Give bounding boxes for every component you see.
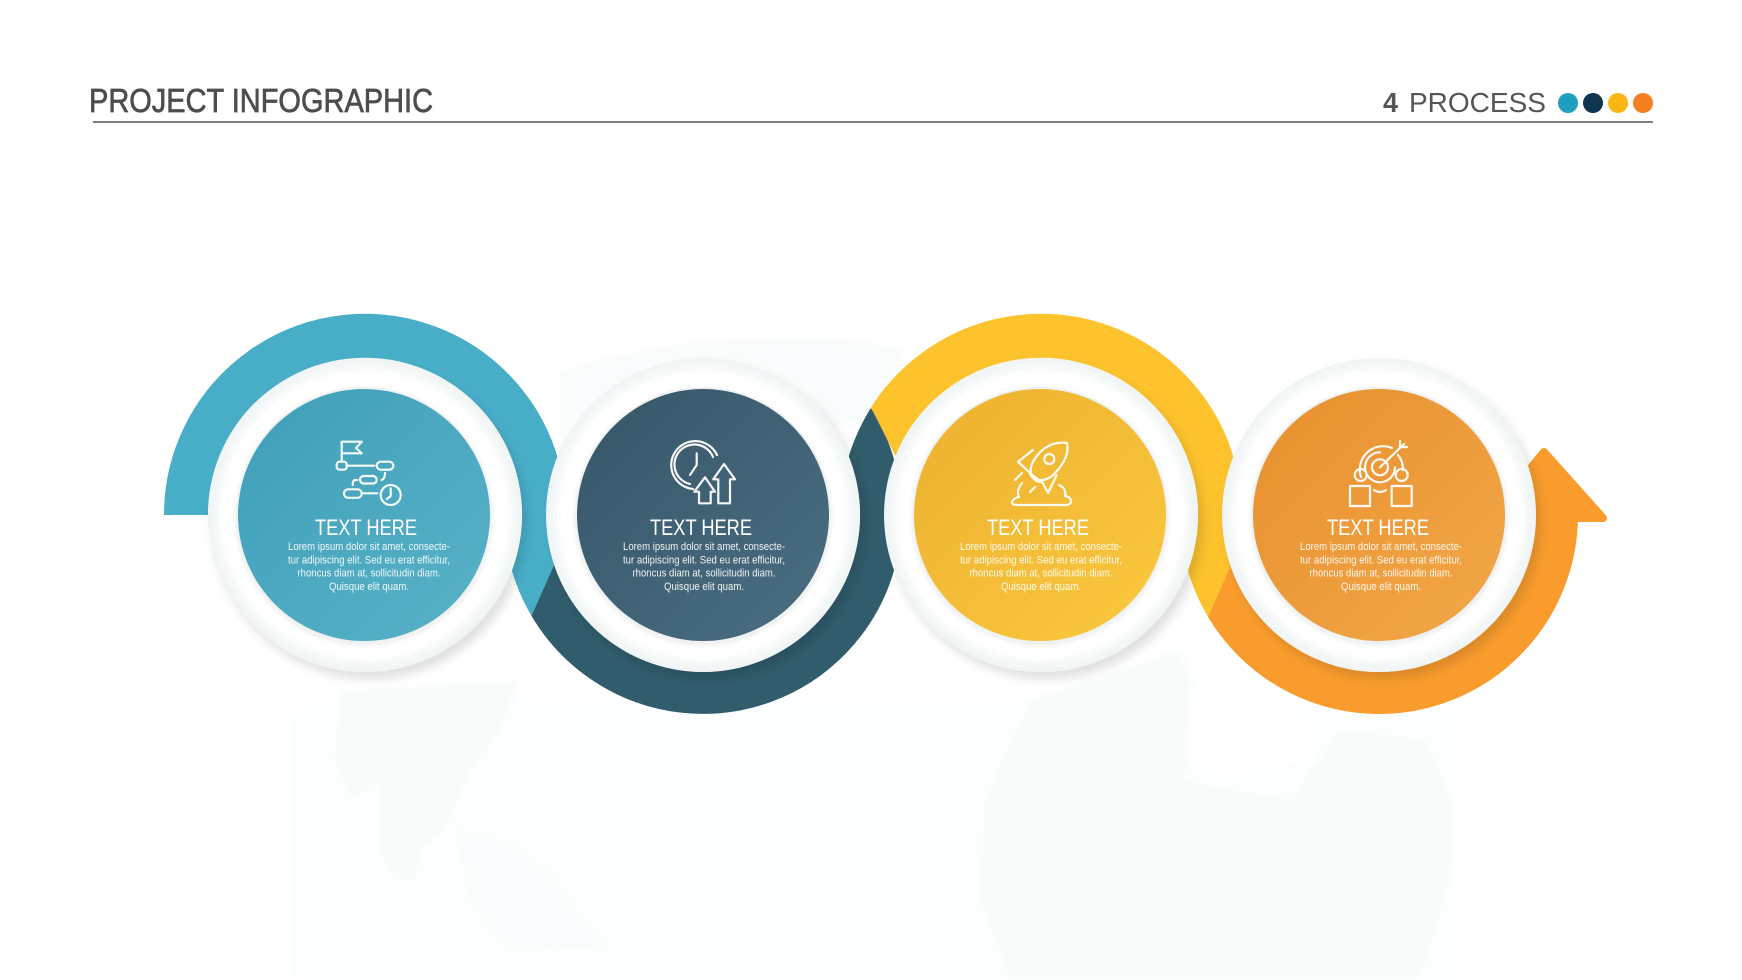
- band: blue arc: [186, 336, 544, 630]
- body text: tur adipiscing elit. Sed eu erat efficitur,: [1300, 554, 1462, 566]
- band: dark arc: [525, 400, 881, 693]
- heading: TEXT HERE: [1327, 515, 1429, 540]
- body text: tur adipiscing elit. Sed eu erat efficitur,: [960, 554, 1122, 566]
- heading: TEXT HERE: [315, 515, 417, 540]
- step 3 circle: [884, 358, 1198, 672]
- header rule: [93, 121, 1653, 123]
- body text: Quisque elit quam.: [664, 581, 744, 593]
- body text: Quisque elit quam.: [1341, 581, 1421, 593]
- body text: rhoncus diam at, sollicitudin diam.: [1310, 568, 1452, 580]
- body text: rhoncus diam at, sollicitudin diam.: [970, 568, 1112, 580]
- process label: PROCESS: [1409, 87, 1546, 118]
- body text: Lorem ipsum dolor sit amet, consecte-: [1300, 541, 1462, 553]
- band: yellow arc: [862, 336, 1220, 630]
- body text: Lorem ipsum dolor sit amet, consecte-: [623, 541, 785, 553]
- body text: rhoncus diam at, sollicitudin diam.: [298, 568, 440, 580]
- body text: [1300, 541, 1462, 593]
- body text: tur adipiscing elit. Sed eu erat efficitur,: [623, 554, 785, 566]
- body text: Quisque elit quam.: [1001, 581, 1081, 593]
- title: PROJECT INFOGRAPHIC: [89, 82, 433, 119]
- background world map: [292, 338, 1454, 980]
- heading: TEXT HERE: [987, 515, 1089, 540]
- legend dots: [1558, 93, 1653, 113]
- step 1 circle: [208, 358, 522, 672]
- body text: Lorem ipsum dolor sit amet, consecte-: [960, 541, 1122, 553]
- body text: [623, 541, 785, 593]
- body text: Quisque elit quam.: [329, 581, 409, 593]
- body text: rhoncus diam at, sollicitudin diam.: [632, 568, 776, 580]
- band: orange arrow: [1201, 452, 1603, 693]
- body text: tur adipiscing elit. Sed eu erat efficitur,: [288, 554, 450, 566]
- icon: project flow: [337, 442, 401, 505]
- icon: rocket: [1012, 443, 1071, 505]
- process label: 4: [1383, 87, 1398, 118]
- body text: [960, 541, 1122, 593]
- icon: clock with up arrows: [671, 441, 735, 503]
- step 2 circle: [546, 358, 860, 672]
- heading: TEXT HERE: [650, 515, 752, 540]
- step 4 circle: [1222, 358, 1536, 672]
- body text: [288, 541, 450, 593]
- body text: Lorem ipsum dolor sit amet, consecte-: [288, 541, 450, 553]
- icon: target and team: [1350, 441, 1412, 506]
